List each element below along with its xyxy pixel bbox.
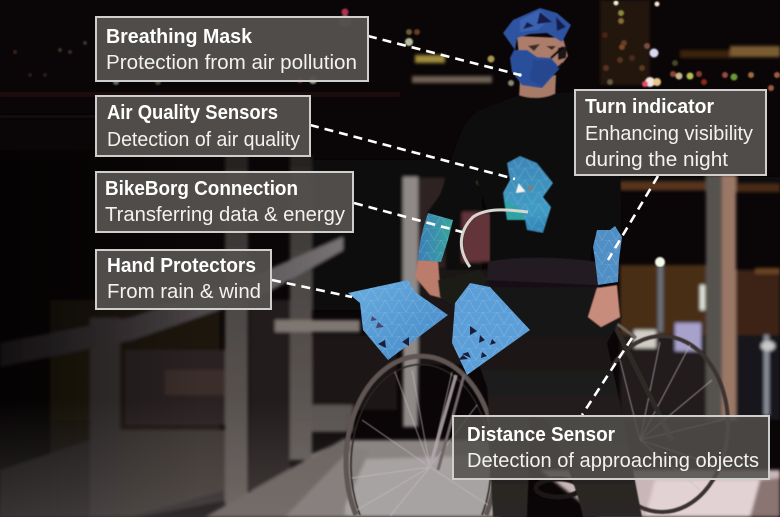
interior right [620,177,780,191]
leader: Hand Protectors [272,280,352,297]
callout: Breathing Mask [96,17,368,81]
interior left [50,300,220,470]
jacket hem [487,258,598,289]
icon: chest module [503,156,553,233]
leader: Distance Sensor [582,338,632,415]
face [517,36,568,72]
left vignette [0,150,200,517]
callout: Turn indicator: Turn indicator [585,96,714,118]
lights right [675,323,701,351]
callout: Hand Protectors: Hand Protectors [107,255,256,277]
icon: hand protectors [348,280,530,375]
callout: BikeBorg Connection [96,172,353,232]
posts [90,318,120,517]
callout: Turn indicator: during the night [585,149,728,171]
leader: BikeBorg Connection [354,203,462,232]
callout: Hand Protectors [96,250,271,309]
trousers [470,280,642,517]
mask [510,50,560,88]
icon: forearm modules [418,213,622,285]
callout: BikeBorg Connection: BikeBorg Connection [105,178,298,200]
left hand [415,260,441,298]
callout: Air Quality Sensors [96,96,310,156]
leader: Air Quality Sensors [310,125,515,179]
neck [519,75,556,98]
callout: Breathing Mask: Protection from air pollution [106,52,357,74]
ground [0,430,230,517]
shirt [427,92,621,285]
callout: Distance Sensor: Distance Sensor [467,424,615,446]
icon: connection cable [461,210,528,267]
rail [0,237,343,367]
interior behind man [312,160,482,310]
leader: Turn indicator [608,176,658,260]
callout: Turn indicator [575,90,766,175]
distant glow [730,46,780,57]
callout: Air Quality Sensors: Air Quality Sensors [107,102,278,124]
bicycle [346,320,728,516]
callout: Breathing Mask: Breathing Mask [106,26,253,48]
callout: Hand Protectors: From rain & wind [107,281,261,303]
ledge [205,438,352,517]
callout: BikeBorg Connection: Transferring data & energy [105,204,345,226]
bokeh lights [13,0,780,267]
bottom fade [0,400,345,517]
callout: Air Quality Sensors: Detection of air quality [107,129,300,151]
leader: Breathing Mask [368,36,520,75]
bag strap [438,270,488,310]
cyclist body [415,75,642,517]
callout: Turn indicator: Enhancing visibility [585,123,753,145]
callout: Distance Sensor: Detection of approaching objects [467,450,759,472]
helmet [503,8,571,50]
icon: helmet and mask [503,8,571,88]
callout: Distance Sensor [453,416,769,479]
right hand [588,285,620,327]
